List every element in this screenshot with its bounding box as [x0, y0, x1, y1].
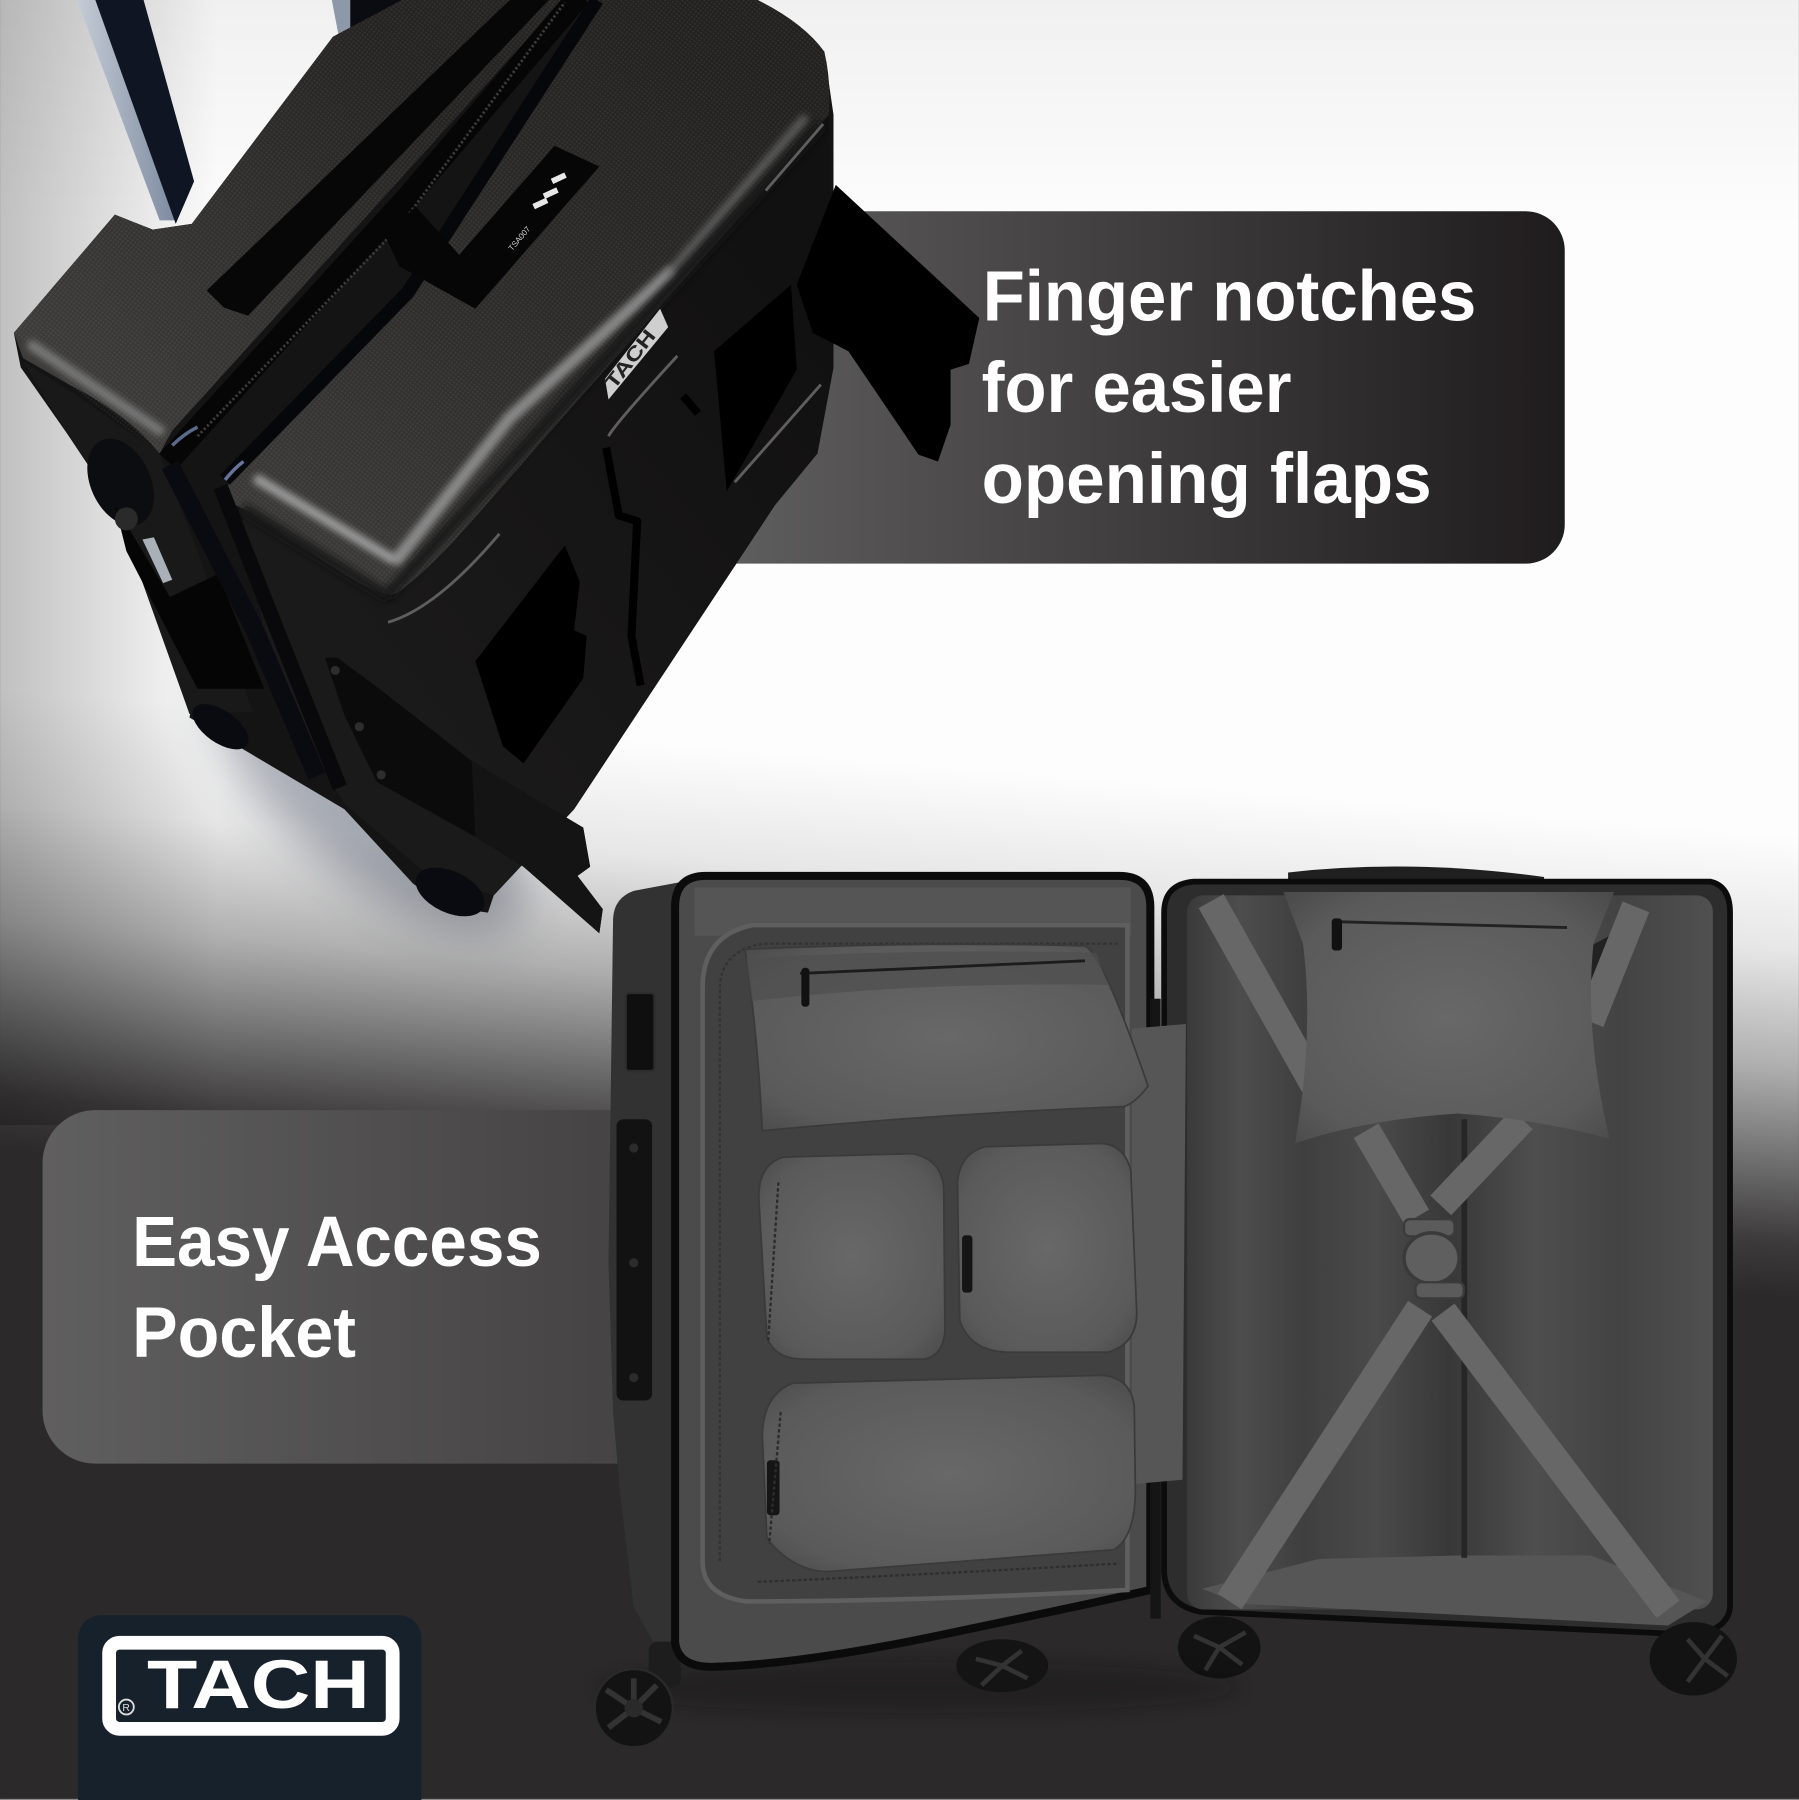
- open suitcase: left half with packing pouches: [595, 876, 1240, 1747]
- upper suitcase with finger-notch flaps: [14, 0, 979, 933]
- zipper frame: [168, 0, 597, 788]
- panel: easy access callout: [43, 1110, 643, 1464]
- wheels right half: [1178, 1616, 1737, 1696]
- heading: easy access text: Pocket: [132, 1294, 356, 1373]
- side plate with rivets: [617, 1119, 652, 1401]
- black cut-out windows: [475, 285, 797, 763]
- lid frame and lining: [675, 876, 1150, 1667]
- pouch: large bottom: [762, 1375, 1135, 1572]
- side latch: [626, 993, 654, 1071]
- pillow pouch: [1283, 892, 1614, 1143]
- heading: easy access text: [132, 1203, 542, 1373]
- lid top band: [695, 887, 1131, 936]
- shell and lining: [1164, 882, 1730, 1635]
- strap buckle: [1404, 1219, 1464, 1298]
- floor of case: [1202, 1555, 1707, 1626]
- wheels left half: [595, 1639, 1048, 1747]
- pouch: middle right: [957, 1143, 1137, 1352]
- combination lock: [385, 146, 599, 309]
- open flap bottom: [325, 658, 603, 933]
- pouch: middle left: [759, 1154, 945, 1359]
- TACH tag: [601, 309, 668, 399]
- pouch: large top: [745, 944, 1148, 1131]
- heading: finger notches text: for easier: [982, 349, 1292, 428]
- hinge: [1150, 999, 1161, 1619]
- TACH tag: TACH: [601, 326, 661, 393]
- heading: finger notches text: Finger notches: [983, 257, 1476, 336]
- divider strip: [1132, 1024, 1186, 1484]
- heading: easy access text: Easy Access: [132, 1203, 542, 1282]
- outer shell: [608, 882, 689, 1653]
- floor shadow: [597, 1662, 1240, 1713]
- logo: TACH badge: [78, 1615, 421, 1800]
- inner pocket panel: [703, 925, 1127, 1601]
- lock label: TSA007: [507, 224, 533, 253]
- seam notches: [606, 396, 698, 685]
- panel: finger notches callout: [689, 211, 1565, 564]
- soft shadow under upper suitcase: [166, 605, 569, 979]
- right side face: [238, 115, 833, 895]
- left half lid: [14, 0, 563, 453]
- heading: finger notches text: [982, 257, 1476, 519]
- lid highlights: [32, 119, 817, 595]
- carry handle: [207, 0, 549, 316]
- left side face and wheel lock: [23, 362, 264, 714]
- suitcase body: [14, 0, 833, 913]
- handle on right half: [1288, 867, 1544, 884]
- telescopic handle: [77, 0, 413, 224]
- center zipper: [1461, 1119, 1467, 1558]
- lower wheels: [185, 695, 492, 926]
- open flap top right: [797, 185, 979, 461]
- open suitcase: right half with cross straps: [1164, 867, 1737, 1696]
- logo: TACH badge: R: [122, 1703, 130, 1714]
- heading: finger notches text: opening flaps: [982, 440, 1432, 519]
- right half lid: [218, 0, 829, 595]
- logo: TACH badge: TACH: [147, 1646, 370, 1723]
- cross straps: [1211, 901, 1668, 1609]
